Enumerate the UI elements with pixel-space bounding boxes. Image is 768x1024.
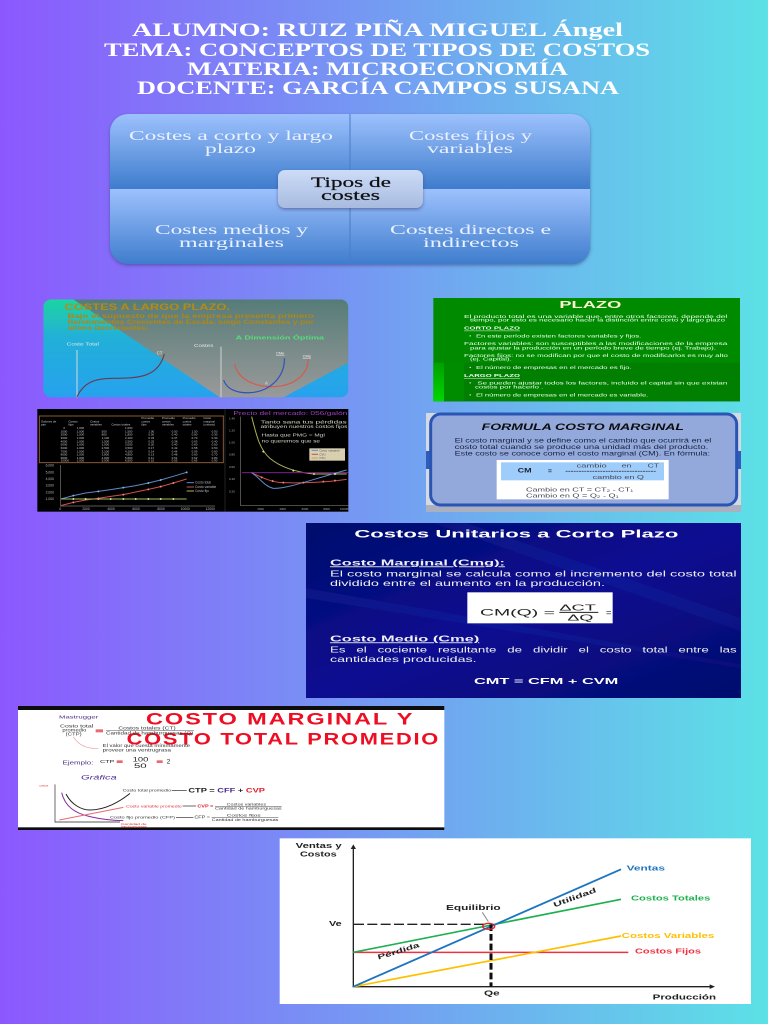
body text: costos por hacerlo . — [475, 385, 543, 390]
chart: dimension optima: A — [265, 380, 268, 385]
cost table: 0.63 — [192, 439, 198, 443]
title block: ALUMNO: RUIZ PIÑA MIGUEL Ángel — [132, 19, 623, 41]
section: costo marginal — [330, 557, 737, 588]
axis labels — [296, 843, 716, 1002]
chart: total cost lines: 4,000 — [46, 477, 54, 481]
cost table: 0.59 — [192, 449, 198, 453]
line: costos totales — [353, 899, 621, 952]
cost table: 0.70 — [192, 436, 198, 440]
cost table: 6,500 — [125, 459, 133, 463]
line: costos fijos — [353, 950, 628, 955]
description text — [67, 313, 315, 332]
heading — [127, 710, 440, 749]
example: 50 — [134, 763, 147, 770]
chart: total cost lines: 0 — [59, 507, 61, 511]
cost table: 0.42 — [172, 446, 178, 450]
cost table: fijos — [141, 423, 147, 427]
formula box: CM(Q) = — [480, 608, 555, 618]
chart: marginal cost curves: 0.60 — [229, 465, 235, 469]
cost table: (unitario) — [203, 423, 215, 427]
equation: CMT = CFM + CVM — [474, 676, 618, 686]
body text: • — [469, 381, 471, 386]
line labels: Costos Variables — [622, 933, 715, 940]
equilibrium guides — [354, 905, 501, 987]
heading: COSTO MARGINAL Y — [146, 710, 414, 729]
example — [63, 757, 171, 770]
chart: costo promedio: Cantidad de — [121, 822, 148, 826]
chart: costo promedio: CFP = — [194, 815, 211, 820]
area label: perdida: Pérdida — [377, 942, 421, 962]
chart: costo promedio: hamburguesas — [121, 825, 148, 829]
body text: (ej. Capital). — [470, 357, 512, 362]
body text: El producto total es una variable que, entre otros factores, depende del — [464, 314, 727, 319]
cost table: 0.90 — [192, 433, 198, 437]
chart: coste total — [67, 341, 164, 397]
chart: costo promedio: Costos variables — [227, 802, 266, 806]
cost table: 9000 — [61, 456, 68, 460]
chart: costo promedio: CTP = CFF + CVP — [188, 789, 265, 795]
cost table: 0.14 — [148, 449, 154, 453]
cost table: 0.50 — [148, 433, 154, 437]
quadrant: corto y largo plazo — [129, 128, 333, 156]
chart: dimension optima — [194, 334, 325, 397]
cost table: 0.40 — [212, 439, 218, 443]
quadrant: medios y marginales — [155, 222, 308, 250]
cost table: 0.58 — [192, 446, 198, 450]
cost table: 5,500 — [102, 459, 109, 463]
formula box: CT — [648, 464, 660, 470]
cost table: 0.90 — [212, 459, 218, 463]
cost table: 1,100 — [102, 436, 109, 440]
cost table: 1,800 — [125, 433, 133, 437]
chart: costo promedio: Cantidad de hamburguesas — [212, 818, 279, 822]
body text: El número de empresas en el mercado es fijo. — [476, 365, 632, 370]
chart: total cost lines: 2000 — [82, 507, 90, 511]
example: 2 — [167, 758, 171, 765]
section: costo marginal: El costo marginal se calcula como el incremento del costo total — [330, 569, 737, 579]
cost table: 1,000 — [77, 453, 84, 457]
chart: dimension optima: CMe — [303, 353, 312, 358]
chart: dimension optima: CMe — [276, 350, 285, 355]
chart: total cost lines: 2,000 — [46, 490, 54, 494]
cost table: 0.51 — [172, 456, 178, 460]
definition: promedio — [62, 727, 87, 732]
formula box — [497, 460, 669, 499]
cost table: 0.70 — [212, 453, 218, 457]
center box: tipos de costes — [278, 170, 423, 208]
axis labels: Ve — [329, 921, 342, 928]
chart: total cost lines: 5,000 — [46, 470, 54, 474]
chart: marginal cost curves: Hasta que PMG = MgI — [262, 433, 325, 438]
cost table: 0.30 — [212, 433, 218, 437]
body text: Factores variables: son susceptibles a las modificaciones de la empresa — [464, 341, 728, 346]
image: costos unitarios a corto plazo — [306, 523, 741, 698]
definition: El valor que cuesta mínimamente — [103, 743, 191, 748]
line: costos variables — [353, 936, 621, 987]
cost table: 7000 — [61, 449, 68, 453]
title block: DOCENTE: GARCÍA CAMPOS SUSANA — [137, 77, 620, 99]
cost table: 3,800 — [102, 453, 109, 457]
line labels — [622, 866, 715, 956]
line labels: Costos Totales — [631, 896, 711, 903]
cost table: 0.40 — [172, 433, 178, 437]
heading: COSTES A LARGO PLAZO. — [64, 302, 230, 312]
example: 100 — [133, 757, 149, 764]
cost table: 4,600 — [102, 456, 109, 460]
line labels: Ventas — [627, 866, 665, 873]
heading: FORMULA COSTO MARGINAL — [482, 422, 684, 432]
chart: marginal cost curves: 10000 — [340, 507, 349, 511]
image: formula costo marginal — [426, 413, 741, 512]
definition: proveer una ventrugrasa — [103, 747, 172, 752]
cost table: 1,000 — [77, 433, 84, 437]
formula box: ΔCT — [559, 602, 597, 612]
chart: marginal cost curves: 4000 — [279, 507, 286, 511]
cost table: 0.50 — [212, 446, 218, 450]
chart: costo promedio: Costo variable promedio — [126, 803, 183, 808]
cost table: 0 — [63, 426, 65, 430]
quadrant: fijos y variables — [409, 128, 532, 156]
cost table: 0.50 — [212, 443, 218, 447]
cost table: 0.50 — [172, 429, 178, 433]
chart: marginal cost curves: Costo marginal — [319, 448, 340, 452]
cost table: 0.60 — [212, 449, 218, 453]
chart: marginal cost curves: atribuyen nuestros costos fijos — [261, 424, 348, 429]
cost table: 1.00 — [148, 429, 154, 433]
image: costes a largo plazo — [43, 299, 348, 397]
formula box: = — [606, 608, 611, 618]
cost table: 0.37 — [172, 436, 178, 440]
example: Ejemplo: — [63, 761, 94, 767]
chart: costo promedio: Cantidad de hamburguesas — [215, 807, 282, 811]
cost table: costos — [141, 419, 150, 423]
chart: marginal cost curves: 0.40 — [229, 477, 235, 481]
section: costo medio — [330, 633, 738, 664]
equilibrium guides: Equilibrio — [446, 905, 501, 912]
chart: marginal cost curves: no queremos que se — [262, 439, 321, 444]
cost table: 4,800 — [125, 453, 133, 457]
cost table: 3,000 — [125, 443, 133, 447]
cost table: marginal — [203, 419, 215, 423]
section: costo marginal: Costo Marginal (Cmg): — [330, 557, 505, 567]
cost table: 3000 — [61, 436, 68, 440]
section: costo marginal: dividido entre el aumento en la producción. — [330, 578, 605, 588]
section: costo medio: Es el cociente resultante de dividir el costo total entre las — [330, 645, 738, 655]
cost table: totales — [183, 423, 192, 427]
chart: marginal cost curves — [229, 411, 349, 511]
cost table: 1,000 — [77, 443, 84, 447]
cost table: 1,500 — [102, 439, 109, 443]
chart: total cost lines: 6000 — [132, 507, 140, 511]
quadrant: directos e indirectos — [390, 222, 551, 250]
cost table: Promedio — [183, 416, 196, 420]
cost table: 1,000 — [77, 446, 84, 450]
cost table: 1,000 — [77, 436, 84, 440]
axis labels: Costos — [300, 852, 337, 859]
cost table: 0.33 — [148, 436, 154, 440]
example: CTP — [100, 759, 115, 765]
body text: tiempo, por esto es necesario hacer la distinción entre corto y largo plazo — [470, 318, 726, 323]
cost table: costos — [183, 419, 192, 423]
definition: Cantidad de hamburguesas (Q) — [106, 731, 194, 736]
cost table: 0.11 — [148, 456, 154, 460]
cost table: 8000 — [61, 453, 68, 457]
description text: Bajo el supuesto de que la empresa presenta primero — [67, 313, 314, 320]
cost table: 2,500 — [125, 439, 133, 443]
cost table: variables — [162, 423, 174, 427]
chart: marginal cost curves: 6000 — [302, 507, 309, 511]
axis labels: Ventas y — [296, 843, 342, 850]
chart: marginal cost curves: 0.80 — [229, 453, 235, 457]
definition: Costos totales (CT) — [118, 725, 177, 730]
cost table: 0.25 — [148, 439, 154, 443]
cost table: 1.50 — [192, 429, 198, 433]
chart: total cost lines: Costo fijo — [195, 489, 209, 493]
chart: marginal cost curves: 8000 — [323, 507, 330, 511]
cost table: 0.60 — [192, 453, 198, 457]
chart: costo promedio: Costos fijos — [227, 813, 261, 817]
chart: total cost lines: 3,000 — [46, 484, 54, 488]
cost table: 0.50 — [212, 429, 218, 433]
description text: El costo marginal y se define como el cambio que ocurrirá en el — [455, 439, 711, 445]
chart: marginal cost curves: Tanto sana tus pérdidas — [261, 419, 348, 424]
quadrant: directos e indirectos: indirectos — [423, 235, 519, 250]
chart: marginal cost curves: 1.40 — [229, 416, 235, 420]
chart: total cost lines: 4000 — [107, 507, 115, 511]
quadrant: fijos y variables: variables — [427, 141, 513, 156]
cost table: Promedio — [141, 416, 154, 420]
cost table: 1,000 — [77, 426, 84, 430]
cost table: Costo — [203, 416, 211, 420]
chart: total cost lines: 10000 — [181, 507, 190, 511]
cost table: 0.55 — [172, 459, 178, 463]
center box: tipos de costes: costes — [321, 188, 381, 204]
chart: costo promedio: Costo fijo promedio (CFP) — [110, 814, 176, 819]
cost table: 0.17 — [148, 446, 154, 450]
chart: costo promedio: CVP = — [197, 804, 214, 809]
panel: tipos de costes diagram — [110, 114, 590, 264]
body text: para ajustar la producción en un período breve de tiempo (ej. Trabajo). — [470, 345, 716, 350]
cost table: 0.38 — [172, 439, 178, 443]
section: costo medio: Costo Medio (Cme) — [330, 633, 480, 643]
cost table: Costos totales — [111, 423, 131, 427]
heading: COSTO TOTAL PROMEDIO — [127, 730, 440, 749]
quadrant: corto y largo plazo: plazo — [205, 141, 256, 156]
formula box: Cambio en Q = Q₂ - Q₁ — [526, 493, 619, 499]
formula box: en — [622, 464, 632, 470]
body text: LARGO PLAZO — [464, 373, 521, 378]
body text: El número de empresas en el mercado es variable. — [476, 392, 648, 397]
heading: Costos Unitarios a Corto Plazo — [354, 529, 679, 541]
cost table: variables — [90, 423, 102, 427]
cost table: 1,000 — [77, 439, 84, 443]
cost table: 0.20 — [148, 443, 154, 447]
chart: total cost lines — [46, 464, 216, 511]
cost table: 0.10 — [148, 459, 154, 463]
cost table: 1,000 — [125, 426, 133, 430]
cost table: 0.44 — [172, 449, 178, 453]
cost table: 500 — [102, 429, 107, 433]
formula box — [467, 592, 613, 623]
body text: • — [469, 333, 471, 338]
cost table: Galones de — [41, 419, 57, 423]
cost table: Promedio — [162, 416, 175, 420]
cost table: 1000 — [61, 429, 68, 433]
description text: Este costo se conoce como el costo marginal (CM). En fórmula: — [455, 451, 710, 457]
cost table: 0.60 — [192, 443, 198, 447]
body text — [464, 314, 729, 397]
title block: MATERIA: MICROECONOMÍA — [187, 58, 569, 80]
quadrant: medios y marginales: marginales — [179, 235, 284, 250]
cost table: 2000 — [61, 433, 68, 437]
cost table: 0.80 — [212, 456, 218, 460]
chart: marginal cost curves: 2000 — [257, 507, 264, 511]
cost table: 2,000 — [102, 443, 109, 447]
chart: total cost lines: 8000 — [157, 507, 165, 511]
axis labels: Qe — [484, 990, 500, 997]
chart: dimension optima: A Dimensión Óptima — [236, 334, 325, 342]
image: spreadsheet and cost charts — [37, 409, 349, 512]
formula box: Cambio en CT = CT₂ - CT₁ — [526, 487, 633, 493]
cost table: 1,000 — [77, 449, 84, 453]
cost table: 6000 — [61, 446, 68, 450]
description text: último Decrecientes. — [67, 325, 149, 332]
chart: total cost lines: 1,000 — [46, 497, 54, 501]
formula box: CM — [518, 469, 532, 475]
section: costo medio: cantidades producidas. — [330, 654, 477, 664]
cost table: 1,500 — [125, 429, 133, 433]
chart: marginal cost curves: Precio del mercado: 056/galón — [233, 411, 347, 417]
image: plazo green slide — [433, 298, 740, 401]
chart: total cost lines: Costo variable — [195, 485, 216, 489]
description text: Rendimientos Crecientes de Escala, luego Constantes y por — [67, 319, 315, 326]
chart: marginal cost curves: 1.20 — [229, 428, 235, 432]
chart: costo promedio: costos — [39, 784, 49, 788]
cost table: 0.62 — [192, 456, 198, 460]
chart: costo promedio — [39, 775, 282, 829]
quadrant: corto y largo plazo: Costes a corto y largo — [129, 128, 333, 143]
cost table: 3,500 — [125, 446, 133, 450]
chart: total cost lines: Costo total — [195, 481, 211, 485]
chart: marginal cost curves: 0.20 — [229, 489, 235, 493]
description text: costo total cuando se produce una unidad más del producto. — [455, 445, 709, 451]
title block: TEMA: CONCEPTOS DE TIPOS DE COSTOS — [104, 41, 650, 61]
center box: tipos de costes: Tipos de — [311, 175, 391, 191]
description text — [455, 439, 711, 457]
cost table: 1,000 — [77, 459, 84, 463]
cost table: 1,000 — [77, 429, 84, 433]
cost table: 0.13 — [148, 453, 154, 457]
chart: coste total: Coste Total — [67, 341, 99, 346]
cost table: 800 — [102, 433, 107, 437]
body text: • — [469, 392, 471, 397]
heading: PLAZO — [559, 300, 622, 311]
line labels: Costos Fijos — [635, 949, 701, 956]
body text: CORTO PLAZO — [464, 326, 521, 331]
area label: utilidad: Utilidad — [553, 887, 597, 909]
body text: • — [469, 365, 471, 370]
cost table: 5000 — [61, 443, 68, 447]
chart: marginal cost curves: 1.00 — [229, 441, 235, 445]
cost table: 2,100 — [125, 436, 133, 440]
cost table: 4000 — [61, 439, 68, 443]
formula box: cambio — [577, 464, 607, 470]
title block — [104, 19, 650, 99]
cost table: 1,000 — [77, 456, 84, 460]
definition — [59, 715, 194, 752]
cost table: 0.48 — [172, 453, 178, 457]
cost table: 0.40 — [172, 443, 178, 447]
cost table: costos — [162, 419, 171, 423]
cost table: 10000 — [61, 459, 69, 463]
body text: Factores fijos: no se modifican por que el costo de modificarlos es muy alto — [464, 353, 729, 358]
definition: Mastrugger — [59, 715, 99, 721]
cost table: 5,600 — [125, 456, 133, 460]
chart: total cost lines: 6,000 — [46, 464, 54, 468]
quadrant: medios y marginales: Costes medios y — [155, 222, 308, 237]
cost table: fijos — [68, 423, 74, 427]
cost table: 2,500 — [102, 446, 109, 450]
body text: En este período existen factores variables y fijos. — [476, 333, 641, 338]
cost table: 0.65 — [192, 459, 198, 463]
chart: total cost lines: 12000 — [206, 507, 215, 511]
axis labels: Producción — [653, 995, 716, 1002]
cost table — [39, 416, 223, 463]
cost table: 3,100 — [102, 449, 109, 453]
definition: Costo total — [60, 723, 93, 728]
cost table: 0.30 — [212, 436, 218, 440]
chart: dimension optima: Costes — [194, 343, 213, 348]
quadrant: fijos y variables: Costes fijos y — [409, 128, 532, 143]
chart: marginal cost curves: CVU — [319, 452, 326, 456]
quadrant: directos e indirectos: Costes directos e — [390, 222, 551, 237]
chart: coste total: CT — [157, 350, 163, 355]
axes — [351, 844, 715, 989]
chart: costo promedio: Gráfica — [81, 775, 117, 782]
image: costo marginal y costo total promedio — [18, 706, 444, 830]
definition: (CTP) — [66, 731, 82, 736]
cost table: Costos — [90, 419, 100, 423]
chart: costo promedio: Costo total promedio — [123, 788, 172, 793]
cost table: pan — [41, 423, 46, 427]
cost table: Costos — [68, 419, 78, 423]
line: ventas — [353, 869, 621, 987]
formula box: = — [548, 468, 552, 475]
formula box: cambio en Q — [593, 475, 644, 481]
body text: Se pueden ajustar todos los factores, incluido el capital sin que existan — [477, 381, 728, 386]
image: punto de equilibrio chart — [280, 838, 751, 1004]
chart: marginal cost curves: CTU — [319, 456, 325, 460]
cost table: 4,100 — [125, 449, 133, 453]
formula box: ΔQ — [567, 612, 594, 622]
